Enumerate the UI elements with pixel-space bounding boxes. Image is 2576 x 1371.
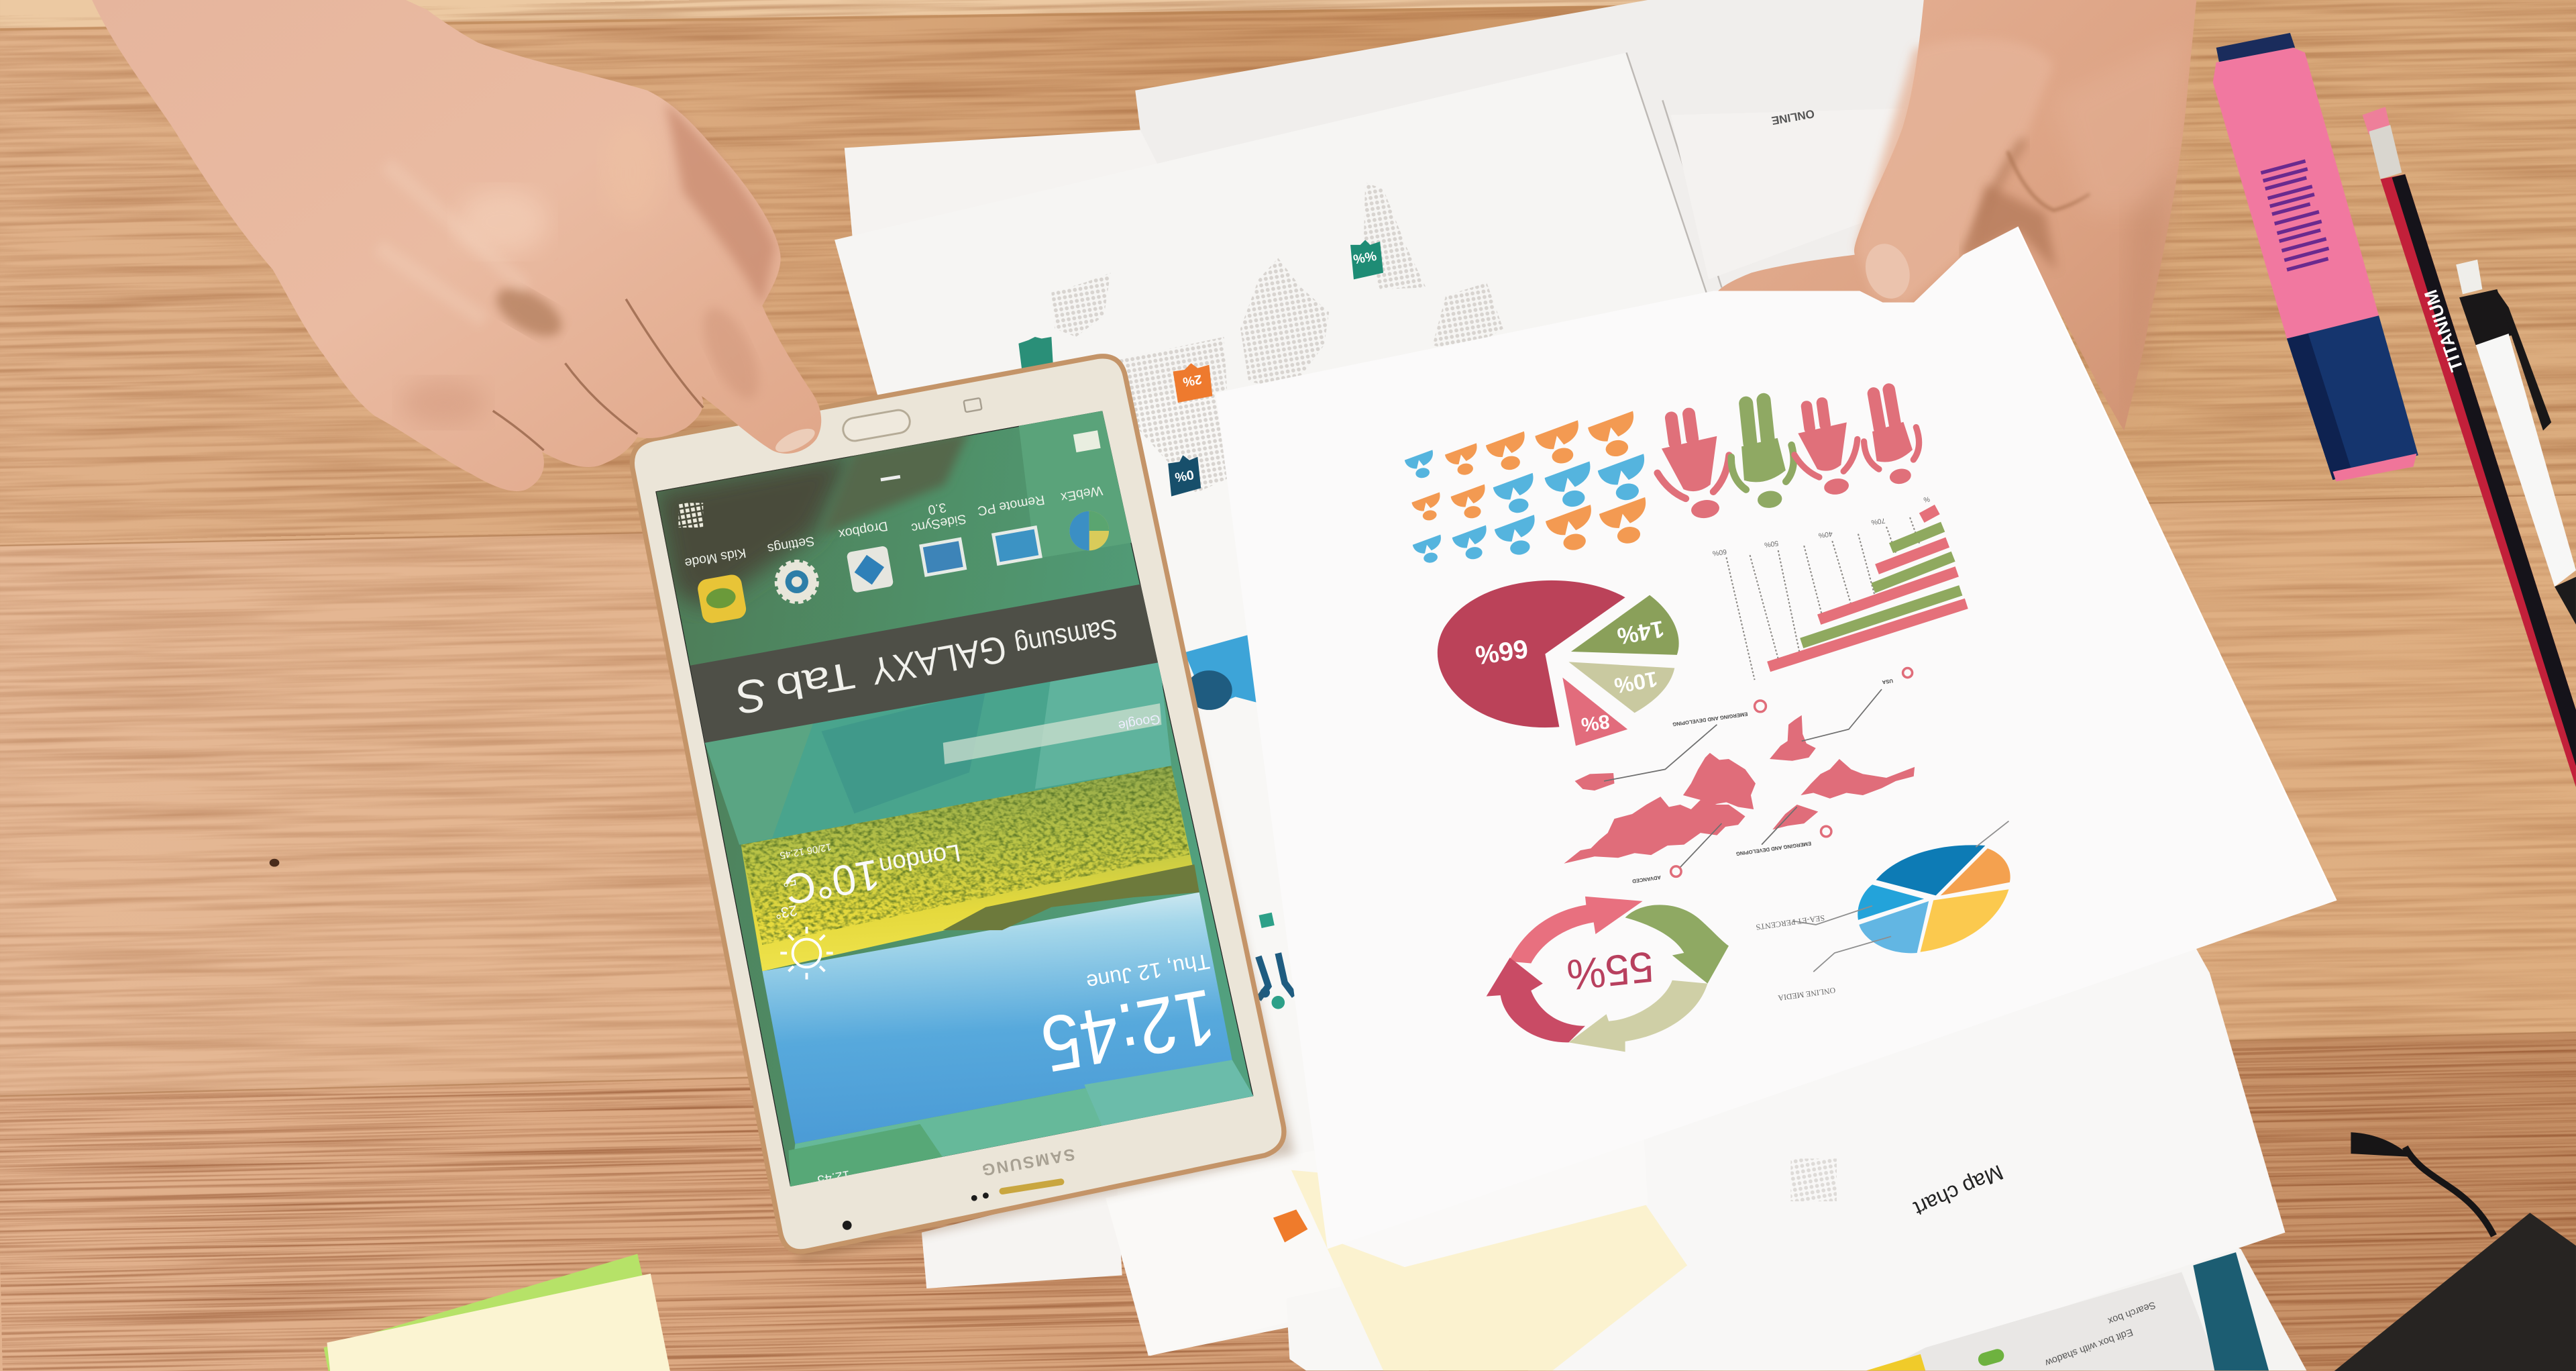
page indicator [880,475,900,481]
sun icon [780,927,833,980]
weather widget [773,839,963,922]
pie chart with percentages: 14% [1615,615,1666,650]
Samsung Galaxy Tab S banner text: GALAXY [868,627,1010,693]
Samsung Galaxy Tab S banner text [733,613,1120,724]
back button icon [963,398,982,412]
app banner [690,583,1160,743]
bar chart: 40% [1818,529,1833,540]
colored pie chart with leader lines [1756,821,2010,1003]
world map with callouts: ADVANCED [1631,874,1662,884]
pie chart with percentages: 10% [1613,667,1659,698]
barcode on highlighter [2261,161,2331,270]
weather widget: 10°C [781,850,883,914]
app labels: Kids Mode [684,545,747,570]
main printed infographic sheet [1216,227,2336,1249]
bottom strip of wallpaper [790,1088,1253,1186]
back sheet with search UI [1364,929,2306,1370]
bottom-left sticky notes [323,1254,670,1371]
stack of back papers [835,0,1942,1356]
settings gear icon [777,562,816,601]
teal facets below banner [705,662,1171,845]
map tags on back paper: %% [1352,248,1377,266]
kids mode icon [696,573,747,625]
Samsung Galaxy Tab S banner text: Samsung [1012,613,1120,662]
back sheet with search UI: Search box [2106,1299,2157,1326]
bar chart [1712,495,1966,680]
bar chart: 70% [1871,516,1886,526]
remote pc icon [991,525,1042,566]
colored pie chart with leader lines: SEA-ET PERCENTS [1756,913,1825,932]
grid icon [678,503,703,527]
weather widget: 12/06 12:45 [779,841,832,860]
app labels [684,483,1104,570]
map tags on back paper: 2% [1181,372,1203,389]
app labels: WebEx [1059,483,1104,505]
map tags on back paper: 0% [1174,467,1195,485]
gold speaker grille [999,1178,1065,1195]
world map with callouts: EMERGING AND DEVELOPING [1735,840,1812,857]
Samsung Galaxy Tab S banner text: S [733,668,771,724]
map tags on back paper [1018,240,1383,497]
colored pie chart with leader lines: ONLINE MEDIA [1777,986,1836,1003]
weather widget: 5° [781,872,798,891]
pink highlighter [2213,33,2418,482]
home button [841,408,912,443]
status bar: 12:45 [816,1167,851,1188]
weather widget: 23° [773,902,799,922]
lower papers [922,929,2306,1370]
yellow sticky note under the sheet [1291,1170,1687,1370]
bar chart: % [1923,495,1931,503]
pie chart with percentages [1438,580,1679,746]
dotted world map on back paper [1051,183,1503,493]
sensors and camera [843,1192,989,1230]
circular arrows 55 percent [1487,897,1729,1052]
app labels: Remote PC [976,492,1046,518]
dotted mini map [1790,1158,1837,1201]
app labels: Dropbox [837,518,889,542]
pie chart with percentages: 8% [1580,710,1611,736]
screen [655,411,1254,1188]
bar chart: 50% [1764,539,1779,549]
tablet [632,356,1295,1262]
small people icon grid [1404,411,1652,565]
bar chart: 60% [1712,548,1727,558]
map chart caption: Map chart [1911,1160,2007,1221]
app labels: Settings [766,534,816,556]
small people and marker on back paper [1258,913,1295,1009]
dropbox icon [846,546,894,593]
striped pencil [2363,107,2576,787]
white sheet edge overlapping sticky [1334,1117,1648,1267]
white pen [2456,260,2576,625]
world map with callouts [1564,668,1915,884]
weather widget: London [877,839,963,880]
world map with callouts: USA [1882,678,1893,685]
photo: grass and water [741,766,1194,971]
tablet body and gold rim [645,368,1295,1262]
notification tab [1073,430,1101,452]
circular arrows 55 percent: 55% [1564,942,1656,999]
date and clock: Thu, 12 June [1085,949,1212,995]
app labels: 3.0 [927,500,947,517]
google search bar: Google [1117,711,1161,733]
webex icon [1069,511,1109,550]
pie chart with percentages: 66% [1474,633,1529,670]
right hand holding the printed sheet [1717,0,2196,431]
google search bar [943,703,1161,764]
orange marker [1273,1209,1307,1242]
black notebook with ribbon [2333,1132,2576,1371]
striped pencil: TITANIUM [2420,287,2467,374]
right hand thumbnail [1859,238,1917,305]
sidesync icon [919,538,967,577]
back sheet with search UI: Edit box with shadow [2043,1326,2134,1368]
app labels: SideSync [910,511,967,536]
online caption on back paper: ONLINE [1770,107,1815,128]
samsung logo: SAMSUNG [979,1145,1076,1179]
large people pictogram [1649,380,1926,524]
left hand pressing tablet [92,0,821,491]
world map with callouts: EMERGING AND DEVELOPING [1672,711,1748,727]
blue shape on back paper [1185,634,1260,710]
date and clock: 12:45 [1035,972,1222,1089]
Samsung Galaxy Tab S banner text: Tab [773,654,858,709]
